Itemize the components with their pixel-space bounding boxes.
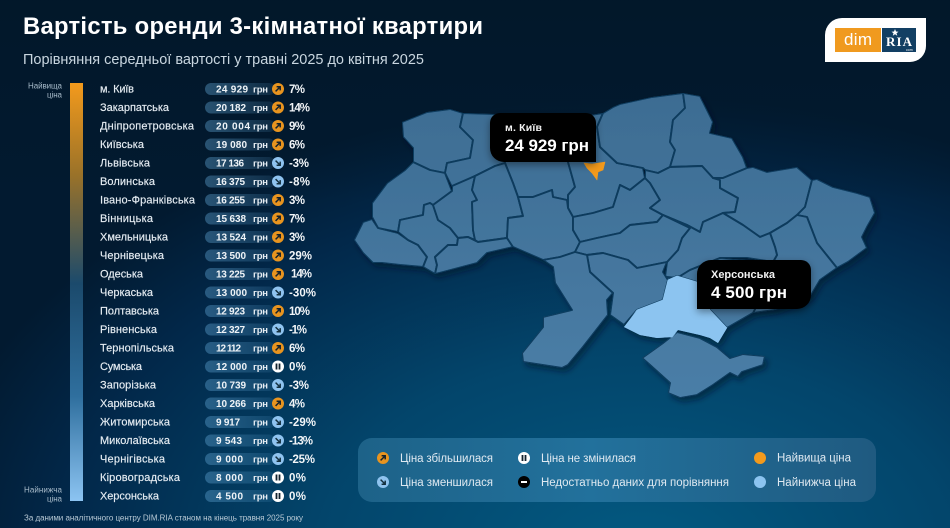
logo: dim.ria <box>825 18 926 62</box>
row: Черкаська <box>100 286 316 300</box>
panel: legend <box>358 438 876 502</box>
row: Закарпатська: Закарпатська <box>100 102 170 114</box>
row: Чернігівська: Чернігівська <box>100 454 166 466</box>
region: Чернігівська <box>597 93 685 173</box>
row: Вінницька: грн <box>253 214 268 225</box>
scale label: highest <box>28 82 63 100</box>
region: Івано-Франківська <box>398 203 458 274</box>
row: Чернівецька <box>100 250 312 262</box>
row: Запорізька <box>100 379 309 392</box>
row: Одеська: 13 225 <box>216 270 245 280</box>
title: Вартість оренди 3-кімнатної квартири <box>23 13 483 40</box>
row: м. Київ: 24 929 <box>216 84 248 96</box>
scale label: lowest: Найнижча <box>24 486 63 494</box>
region: Черкаська <box>573 178 663 242</box>
scale label: lowest: ціна <box>47 494 63 504</box>
row: Хмельницька: 13 524 <box>216 232 246 244</box>
row: Вінницька: Вінницька <box>100 213 154 225</box>
legend: lowest price: Найнижча ціна <box>777 477 857 489</box>
row: Житомирська: Житомирська <box>100 416 171 428</box>
row: Запорізька: Запорізька <box>100 380 157 392</box>
row: Харківська: грн <box>253 399 268 410</box>
region: Донецька <box>753 215 837 313</box>
row: Черкаська: грн <box>253 288 268 299</box>
row: Волинська: -8% <box>289 176 310 188</box>
row: Кіровоградська: Кіровоградська <box>100 472 181 484</box>
ranking table <box>100 83 316 503</box>
legend: price decreased: Ціна зменшилася <box>400 477 493 489</box>
row: Чернігівська: 9 000 <box>216 454 243 466</box>
row: Одеська: грн <box>253 270 268 280</box>
scale label: highest: ціна <box>47 90 63 100</box>
logo: dim.ria: com <box>906 48 913 52</box>
row: Черкаська: -30% <box>289 288 316 300</box>
logo: dim.ria: dim <box>844 30 872 49</box>
row: Волинська: Волинська <box>100 176 156 188</box>
row: Полтавська: грн <box>253 306 268 318</box>
row: Закарпатська: 14% <box>289 102 310 114</box>
row: Чернівецька: 29% <box>289 250 312 262</box>
row: Херсонська: 4 500 <box>216 492 243 502</box>
price scale bar <box>24 82 83 504</box>
legend: price unchanged: Ціна не змінилася <box>541 453 636 465</box>
region: Сумська <box>670 93 747 178</box>
row: Київська: грн <box>253 140 268 151</box>
row: Сумська: 0% <box>289 362 306 374</box>
row: Кіровоградська: 8 000 <box>216 473 243 484</box>
region: Кіровоградська <box>575 215 690 268</box>
row: Івано-Франківська: грн <box>253 196 268 206</box>
callout: м. Київ: 24 929 грн <box>505 136 589 155</box>
row: м. Київ <box>100 83 305 96</box>
row: Львівська: грн <box>253 158 268 170</box>
row: Львівська: 17 136 <box>216 158 244 170</box>
row: Кіровоградська: 0% <box>289 472 306 484</box>
row: Запорізька: грн <box>253 380 268 392</box>
row: Закарпатська: грн <box>253 103 268 114</box>
region: Хмельницька <box>472 163 523 242</box>
row: Сумська: Сумська <box>100 361 143 373</box>
row: Чернігівська: -25% <box>289 454 315 466</box>
row: Вінницька: 15 638 <box>216 214 246 225</box>
row: Миколаївська: Миколаївська <box>100 435 171 447</box>
region: Рівненська <box>445 113 505 187</box>
row: Волинська: грн <box>253 177 268 188</box>
row: Івано-Франківська <box>100 194 305 207</box>
region: Закарпатська <box>354 219 427 267</box>
row: Херсонська: Херсонська <box>100 490 160 502</box>
row: Житомирська <box>100 416 316 429</box>
row: Одеська: 14% <box>291 268 312 280</box>
row: м. Київ: грн <box>253 84 268 96</box>
row: Київська <box>100 138 305 152</box>
legend: insufficient data: Недостатньо даних для порівняння <box>541 477 729 489</box>
row: Харківська <box>100 398 305 410</box>
row: Дніпропетровська <box>100 120 305 133</box>
row: Полтавська: 12 923 <box>216 306 245 318</box>
row: Миколаївська: -13% <box>289 436 313 448</box>
row: Кіровоградська <box>100 472 306 484</box>
row: Волинська <box>100 176 310 188</box>
row: Херсонська <box>100 490 306 503</box>
row: Рівненська <box>100 324 307 336</box>
row: Тернопільська: 6% <box>289 343 305 355</box>
row: м. Київ: м. Київ <box>100 84 134 96</box>
row: Чернівецька: Чернівецька <box>100 250 165 262</box>
row: Закарпатська: 20 182 <box>216 103 246 114</box>
region: Миколаївська <box>587 253 668 325</box>
scale label: highest: Найвища <box>28 82 63 90</box>
row: Полтавська: 10% <box>289 306 310 318</box>
row: Миколаївська: 9 543 <box>216 436 242 447</box>
row: Запорізька: -3% <box>289 380 309 392</box>
region: Київська <box>560 113 645 217</box>
row: Рівненська: грн <box>253 325 268 336</box>
row: Миколаївська: грн <box>253 436 268 447</box>
row: Київська: Київська <box>100 139 145 151</box>
row: Полтавська <box>100 305 310 318</box>
scale label: lowest <box>24 486 63 504</box>
row: Херсонська: грн <box>253 492 268 502</box>
region: Запорізька <box>665 258 773 328</box>
row: Харківська: 4% <box>289 398 305 410</box>
row: Дніпропетровська: Дніпропетровська <box>100 120 195 132</box>
callout: Херсонська <box>697 260 811 309</box>
callout: м. Київ <box>490 113 596 162</box>
region: Дніпропетровська <box>663 213 777 278</box>
row: Чернігівська: грн <box>253 454 268 466</box>
row: Вінницька <box>100 212 305 226</box>
region: Вінницька <box>507 190 580 260</box>
row: Дніпропетровська: грн <box>253 122 268 132</box>
row: Хмельницька <box>100 231 305 244</box>
row: Київська: 6% <box>289 140 305 152</box>
row: Черкаська: 13 000 <box>216 288 247 299</box>
row: Рівненська: -1% <box>289 324 307 336</box>
region: Житомирська <box>506 162 574 199</box>
row: Сумська: грн <box>253 362 268 373</box>
region: Крим <box>642 332 765 398</box>
row: Хмельницька: 3% <box>289 232 305 244</box>
row: Харківська: 10 266 <box>216 399 246 410</box>
row: Тернопільська: грн <box>253 344 268 354</box>
row: Полтавська: Полтавська <box>100 306 160 318</box>
row: Чернігівська <box>100 453 315 466</box>
region: м. Київ (highest price) <box>584 162 605 180</box>
row: Одеська <box>100 268 312 280</box>
row: Львівська: Львівська <box>100 158 151 170</box>
row: Івано-Франківська: 16 255 <box>216 196 245 206</box>
row: Сумська: 12 000 <box>216 362 247 373</box>
map of Ukraine <box>354 93 875 398</box>
row: Івано-Франківська: Івано-Франківська <box>100 194 196 206</box>
row: Хмельницька: грн <box>253 232 268 244</box>
region: Луганська <box>797 179 875 268</box>
row: Львівська <box>100 157 309 170</box>
row: Рівненська: Рівненська <box>100 324 158 336</box>
region: Волинська <box>402 109 473 173</box>
row: Кіровоградська: грн <box>253 473 268 484</box>
region: Полтавська <box>645 166 738 232</box>
row: Черкаська: Черкаська <box>100 287 154 299</box>
row: Івано-Франківська: 3% <box>289 195 305 207</box>
row: Запорізька: 10 739 <box>216 380 246 392</box>
region: hidden northern strip behind callout <box>500 118 560 125</box>
row: м. Київ: 7% <box>289 84 305 96</box>
row: Рівненська: 12 327 <box>216 325 245 336</box>
logo: dim.ria: RIA <box>886 34 913 49</box>
row: Житомирська: 9 917 <box>216 418 240 428</box>
row: Волинська: 16 375 <box>216 177 245 188</box>
row: Чернівецька: 13 500 <box>216 251 246 262</box>
source note: За даними аналітичного центру DIM.RIA станом на кінець травня 2025 року <box>24 514 303 522</box>
legend: price increased: Ціна збільшилася <box>400 453 493 465</box>
region: Тернопільська <box>433 176 477 240</box>
region: Львівська <box>372 162 452 232</box>
row: Сумська <box>100 360 306 374</box>
row: Львівська: -3% <box>289 158 309 170</box>
row: Миколаївська <box>100 434 313 448</box>
row: Тернопільська: Тернопільська <box>100 342 175 354</box>
region: Чернівецька <box>435 237 513 274</box>
row: Дніпропетровська: 9% <box>289 121 305 133</box>
region: Херсонська (lowest price) <box>624 276 727 343</box>
legend: highest price: Найвища ціна <box>777 452 852 464</box>
region: Харківська <box>713 167 812 237</box>
row: Вінницька: 7% <box>289 214 305 226</box>
row: Київська: 19 080 <box>216 140 247 151</box>
row: Харківська: Харківська <box>100 398 156 410</box>
row: Хмельницька: Хмельницька <box>100 232 169 244</box>
row: Закарпатська <box>100 102 310 114</box>
callout: Херсонська: Херсонська <box>711 269 776 281</box>
row: Чернівецька: грн <box>253 251 268 262</box>
row: Житомирська: -29% <box>289 417 316 429</box>
callout: м. Київ: м. Київ <box>505 122 543 134</box>
row: Дніпропетровська: 20 004 <box>216 122 250 132</box>
row: Житомирська: грн <box>253 418 268 428</box>
row: Одеська: Одеська <box>100 268 144 280</box>
subtitle: Порівняння середньої вартості у травні 2025 до квітня 2025 <box>23 52 424 68</box>
row: Тернопільська: 12 112 <box>216 344 241 354</box>
row: Херсонська: 0% <box>289 491 306 503</box>
row: Тернопільська <box>100 342 305 355</box>
callout: Херсонська: 4 500 грн <box>711 283 787 302</box>
region: Одеська <box>522 252 613 368</box>
